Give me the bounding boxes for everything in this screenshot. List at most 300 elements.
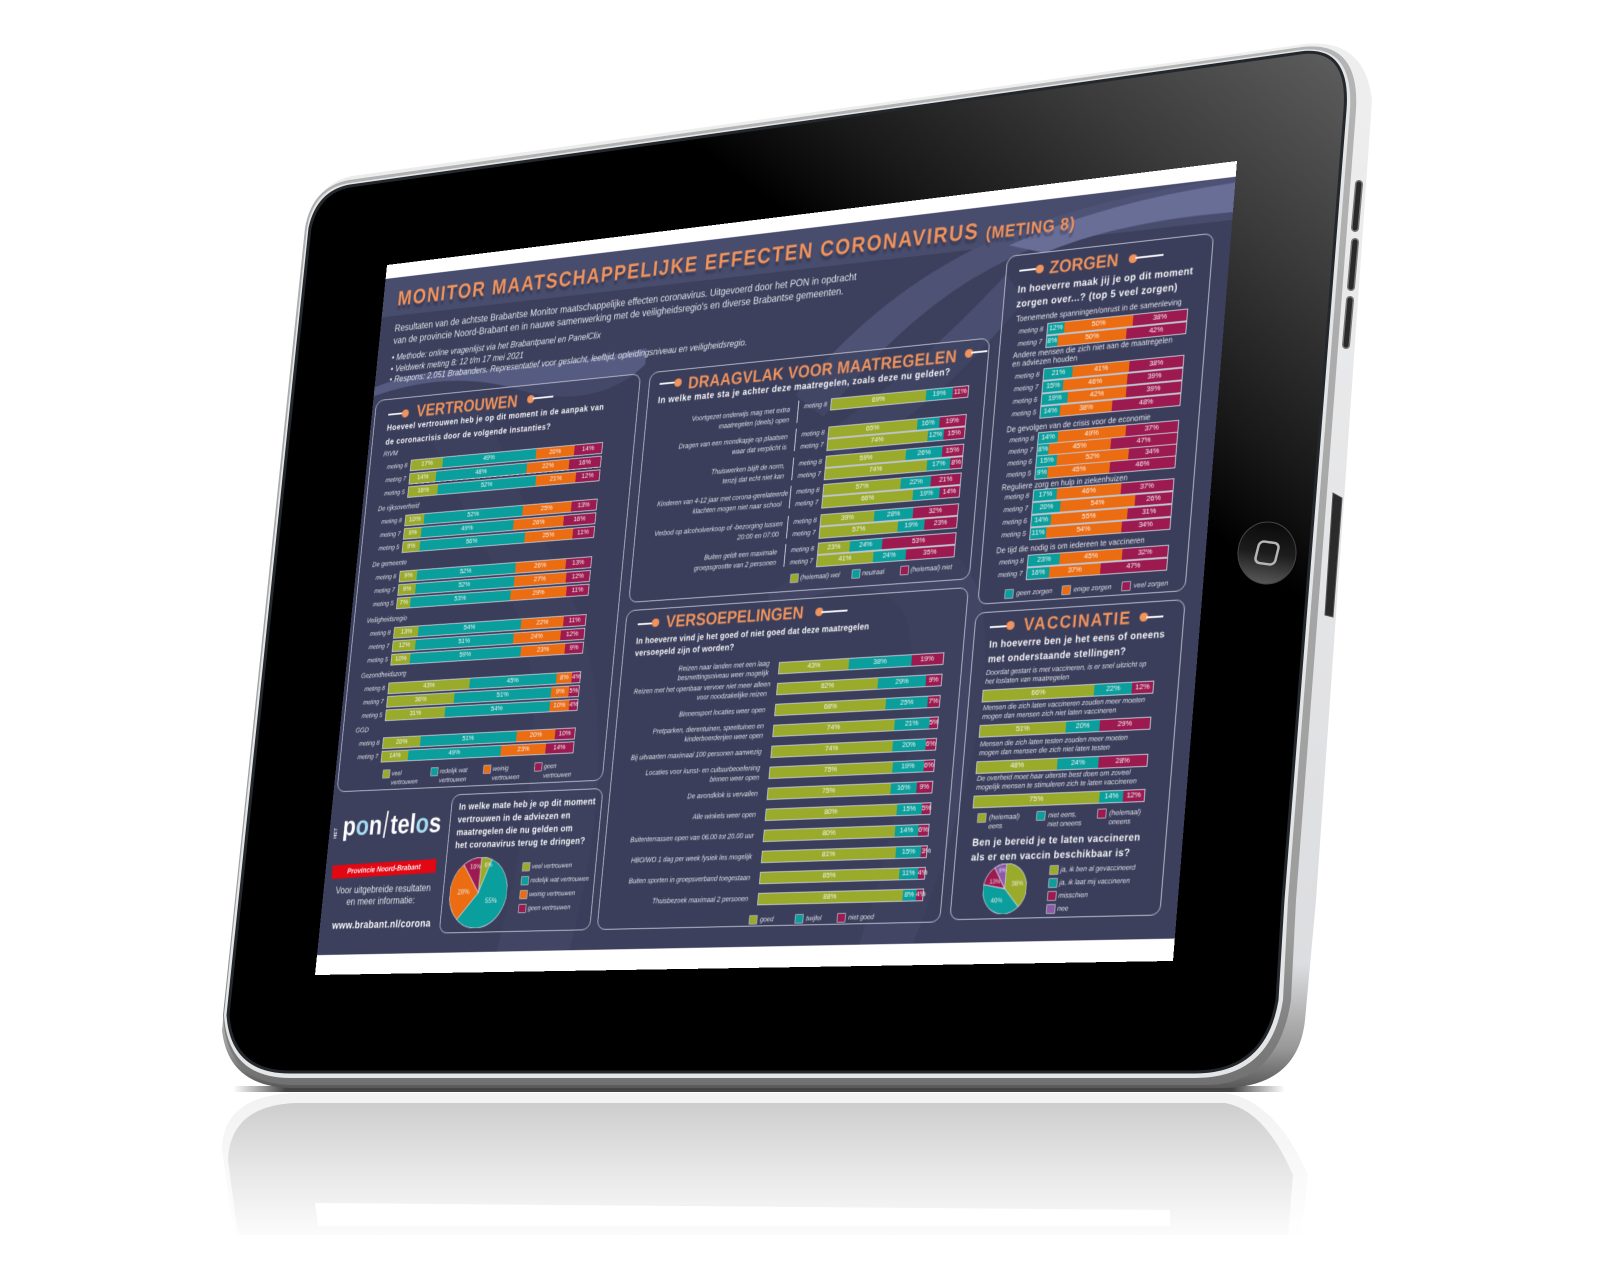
chart: de rijksoverheid: meting 7 [380,530,401,539]
legend: niet eens, [1048,811,1077,819]
chart row: alcohol: 23% [933,518,948,527]
chart: zorg en hulp: 26% [1146,493,1161,503]
chart row 9: 80% [822,828,836,837]
chart row 10: 15% [902,847,916,856]
more information text [332,883,431,931]
chart row: groepsgrootte: Buiten geldt een maximale [704,548,777,562]
chart row: kinderen: 21% [939,474,953,484]
chart row 7: De avondklok is vervallen [687,789,758,801]
chart row 7: 75% [822,786,836,795]
chart row 9: Buitenterrassen open van 06.00 tot 20.00 uur [630,831,754,844]
chart row: alcohol: 32% [928,506,942,515]
chart row: alcohol: 39% [841,513,854,522]
chart row: alcohol: 20:00 en 07:00 [737,530,779,542]
chart row: snel uitzicht: het loslaten van maatregelen [985,673,1070,686]
chart: gezondheidszorg: 5% [569,686,579,695]
legend: vertrouwen: vertrouwen [439,776,467,784]
chart: GGD: 14% [389,751,401,759]
chart: economie: De gevolgen van de crisis voor de economie [1006,412,1151,434]
chart row 3: 25% [900,697,914,707]
chart row: mondkapje: meting 7 [800,441,824,450]
chart row 12: 88% [823,892,837,901]
chart row: thuiswerken: Thuiswerken blijft de norm, [711,461,785,477]
chart row: onderwijs: meting 8 [804,401,827,410]
chart: GGD: 23% [517,744,530,753]
chart row: mondkapje: 16% [921,418,935,428]
chart row: kinderen: 57% [855,481,869,491]
chart: de gemeente: 11% [571,585,584,594]
legend: vertrouwen: vertrouwen [390,778,418,786]
question: het coronavirus terug te dringen? [455,836,586,851]
chart: andere mensen: en adviezen houden [1012,353,1078,369]
chart row 3: Binnensport locaties weer open [679,705,766,719]
chart row: alcohol: meting 7 [792,529,816,538]
chart: GGD: 14% [553,743,566,752]
chart row 10: 81% [822,849,836,858]
chart: veiligheidsregio: 12% [398,640,411,649]
chart row: groepsgrootte: 35% [923,547,937,557]
chart: RIVM: 22% [542,461,554,470]
chart row: kinderen: klachten mogen niet naar school [692,500,782,516]
chart row 4 [652,716,940,743]
intro text: Resultaten van de achtste Brabantse Monitor maatschappelijke effecten coronavirus. Uitgevoerd door het PON in opdracht [394,271,857,334]
legend [1005,577,1179,600]
chart: gezondheidszorg: 8% [559,673,569,682]
chart: de gemeente: 52% [459,566,472,575]
chart row: mondkapje: 74% [870,435,884,444]
chart row 4: Pretparken, dierentuinen, speeltuinen en [652,721,764,736]
chart: de gemeente: 13% [572,558,585,567]
heading: DRAAGVLAK VOOR MAATREGELEN [687,346,958,392]
chart row 7: 16% [896,783,911,792]
chart row: vaccineren [980,695,1152,737]
chart: andere mensen: 15% [1046,380,1060,390]
chart: zorg en hulp: 46% [1082,485,1096,495]
chart row 5: 20% [902,740,916,749]
pie chart: 55% [465,860,477,869]
chart row 4: 5% [929,717,939,727]
chart: zorg en hulp: Reguliere zorg en hulp in ziekenhuizen [1001,473,1128,493]
chart row 4: kinderboerderijen weer open [684,731,763,743]
chart: de rijksoverheid: 11% [577,527,589,536]
chart: GGD: 10% [558,729,571,737]
chart: spanningen: 8% [1047,335,1058,345]
chart: de rijksoverheid: meting 8 [381,517,402,525]
pie chart: 9% [998,868,1006,875]
question: In hoeverre maak jij je op dit moment [1017,265,1194,296]
question: In hoeverre ben je het eens of oneens [989,628,1165,651]
chart: de rijksoverheid: De rijksoverheid [378,501,420,513]
chart row: groepsgrootte [693,532,957,573]
chart row: thuiswerken: 15% [945,445,960,455]
chart row 10: HBO/WO 1 dag per week fysiek les mogelijk [631,852,752,865]
logo: het pon telos [333,807,443,842]
pie chart: 13% [989,879,1000,886]
chart: gezondheidszorg [361,669,582,722]
badge: provincie noord-brabant: Provincie Noord-Brabant [347,862,421,875]
chart row: onderwijs: maatregelen (deels) open [718,415,789,431]
chart: spanningen: Toenemende spanningen/onrust in de samenleving [1016,297,1182,324]
chart: vaccineren: 23% [1037,554,1051,564]
chart: economie: meting 6 [1007,458,1032,467]
chart: veiligheidsregio: 24% [530,632,543,641]
chart: zorg en hulp: 37% [1139,481,1154,491]
chart: zorg en hulp: 31% [1142,506,1157,516]
chart row 3 [678,694,941,719]
ground shadow [233,1086,1285,1092]
chart row: kinderen: meting 7 [795,499,819,508]
legend: (helemaal) [989,813,1020,821]
chart row: overheid: De overheid moet haar uiterste best doen om zoveel [977,768,1131,783]
chart: gezondheidszorg: 4% [572,672,581,681]
legend [336,862,590,914]
chart row: mondkapje: 19% [945,416,959,425]
chart: zorg en hulp: 14% [1034,515,1049,524]
chart row: testen: 24% [1071,757,1085,767]
chart: andere mensen: 39% [1146,383,1161,393]
chart: de gemeente: meting 7 [374,587,395,595]
chart: zorg en hulp: 20% [1039,502,1054,511]
chart row: alcohol: 28% [887,509,901,519]
more information text: en meer informatie: [346,895,415,908]
chart: de gemeente: meting 8 [375,573,397,581]
panel: vertrouwen in adviezen [439,788,603,934]
reflection of tablet [222,1093,1308,1240]
chart: zorg en hulp: 17% [1038,489,1053,499]
chart row 4: 74% [827,722,840,732]
chart row 12: 8% [904,890,915,899]
chart: vaccineren: 45% [1084,551,1098,561]
intro text: • Veldwerk meting 8: 12 t/m 17 mei 2021 [390,350,524,375]
chart: gezondheidszorg: meting 7 [363,698,384,706]
chart row 9: 14% [899,825,914,835]
chart: RIVM: 16% [417,485,429,494]
chart: RIVM: 52% [480,480,493,489]
question: In welke mate sta je achter deze maatregelen, zoals deze nu gelden? [657,367,951,406]
legend [977,806,1161,835]
chart row: snel uitzicht: Doordat gestart is met vaccineren, is er snel uitzicht op [986,660,1147,677]
chart: zorg en hulp: 11% [1031,527,1045,537]
chart row: mondkapje: meting 8 [801,429,825,438]
panel: draagvlak voor maatregelen [628,337,990,603]
chart row 12: 4% [916,889,926,898]
chart row 1: 38% [873,657,887,666]
chart: RIVM: 17% [421,459,433,468]
chart: zorg en hulp: 54% [1090,497,1105,507]
chart: gezondheidszorg: meting 8 [364,685,385,693]
chart: zorg en hulp: meting 8 [1004,492,1029,501]
question [987,627,1182,666]
chart: veiligheidsregio: meting 5 [367,656,388,664]
chart row 6 [645,759,936,784]
chart row 11: 4% [917,868,928,877]
chart: GGD [355,726,576,763]
chart: de gemeente: meting 5 [373,600,394,608]
chart: GGD: 51% [462,734,474,742]
chart: andere mensen: meting 5 [1011,409,1037,418]
chart row: vaccineren: 51% [1015,724,1030,733]
chart: veiligheidsregio: Veiligheidsregio [366,614,407,625]
legend: vertrouwen: geen [544,763,557,770]
chart row: thuiswerken: 17% [932,459,946,468]
legend [748,912,874,925]
chart row: thuiswerken: meting 7 [797,470,821,480]
chart row 1: besmettingsniveau weer mogelijk [677,668,769,682]
chart: vaccineren: 16% [1031,567,1045,577]
legend: oneens [1108,818,1131,826]
chart row: overheid: mogelijk mensen te stimuleren zich te laten vaccineren [976,777,1137,792]
chart: vaccineren: 47% [1126,560,1141,570]
question: vertrouwen in de adviezen en [457,810,571,825]
chart row 1 [677,652,945,682]
chart: andere mensen: 42% [1090,389,1104,399]
chart: economie: 34% [1145,446,1160,456]
chart row: mondkapje [678,414,967,456]
legend: (helemaal) [1109,808,1141,817]
chart row 1: Reizen naar landen met een laag [678,658,770,673]
chart row 6: Locaties voor kunst- en cultuurbeoefening [645,763,761,777]
chart: de gemeente: 9% [404,571,413,579]
pie chart: 10% [470,864,481,871]
chart: RIVM: 49% [483,453,495,462]
chart: gezondheidszorg: Gezondheidszorg [361,669,407,680]
question: met onderstaande stellingen? [988,646,1127,665]
chart: gezondheidszorg: 31% [409,708,422,717]
chart: gezondheidszorg: 45% [506,676,519,685]
chart: veiligheidsregio: 59% [459,650,471,659]
legend: redelijk wat vertrouwen [530,875,589,884]
chart: de gemeente: 27% [534,574,546,583]
chart: RIVM: 21% [549,474,562,483]
chart: GGD: GGD [355,726,369,735]
chart row 7 [686,780,934,801]
chart: de rijksoverheid: 9% [407,541,416,550]
chart row: mondkapje: 12% [929,429,943,439]
chart row 8 [692,802,932,822]
legend [1046,861,1155,916]
chart: zorg en hulp: meting 7 [1003,505,1028,514]
heading: vertrouwen: VERTROUWEN [416,392,519,421]
chart: de gemeente: 12% [571,571,584,580]
chart row: thuiswerken [711,443,964,486]
chart: vaccineren [993,533,1169,582]
chart row 11: 85% [822,871,836,880]
chart: economie: 47% [1136,435,1151,445]
chart row 3: 68% [824,701,837,711]
chart: vaccineren: 32% [1138,547,1153,557]
chart: GGD: meting 7 [357,753,378,761]
chart row: thuiswerken: 8% [951,457,961,467]
chart: andere mensen [1011,335,1185,419]
chart: de gemeente: 53% [454,594,466,602]
chart: gezondheidszorg: meting 5 [361,712,383,720]
chart row 4: 21% [905,718,919,728]
chart row 12 [652,888,926,906]
chart: andere mensen: meting 7 [1014,384,1039,393]
chart: zorg en hulp: 34% [1138,519,1153,529]
chart: spanningen: meting 8 [1018,326,1044,335]
chart: zorg en hulp: 55% [1082,511,1096,521]
chart row: thuiswerken: 26% [917,447,931,457]
chart row 8: 5% [921,803,932,812]
chart: vaccineren: meting 7 [998,570,1023,579]
chart: spanningen: 38% [1153,312,1167,322]
panel: vertrouwen [337,373,641,792]
chart: andere mensen: 14% [1043,405,1058,415]
chart row: overheid: 12% [1126,790,1141,800]
chart: andere mensen: 38% [1079,402,1094,412]
chart row 2: 9% [928,675,939,684]
chart row: groepsgrootte: meting 7 [790,557,813,566]
chart: spanningen: 42% [1149,325,1164,335]
chart: gezondheidszorg: 9% [555,687,565,695]
chart row 6: 75% [824,765,838,774]
chart: economie: 8% [1038,444,1048,454]
chart row 2 [633,673,943,702]
chart row: groepsgrootte: 24% [859,539,873,549]
legend: goed [760,916,774,923]
legend: veel vertrouwen [532,862,572,870]
chart: de rijksoverheid: 25% [540,503,553,512]
chart row: testen: 28% [1115,756,1130,765]
chart: de gemeente: 7% [399,598,408,606]
title suffix: (METING 8) [985,213,1076,243]
chart row: snel uitzicht: 12% [1135,682,1150,692]
chart: veiligheidsregio: 10% [395,654,407,663]
chart row: mondkapje: 65% [866,423,880,433]
side buttons [1325,184,1359,617]
chart: veiligheidsregio: 12% [566,629,579,638]
chart: de rijksoverheid: 9% [408,528,417,537]
chart: andere mensen: 39% [1147,371,1162,381]
intro text: • Respons: 2.051 Brabanders. Representatief voor geslacht, leeftijd, opleidingsniveau en veiligheidsregio. [389,337,748,386]
chart row 5: 74% [825,743,839,753]
chart: economie: meting 7 [1008,446,1033,456]
chart: economie: 52% [1085,451,1100,461]
tablet screen: infographic [315,161,1237,975]
legend: vertrouwen [382,762,572,786]
chart row 6: 19% [901,761,915,770]
chart row: alcohol: Verbod op alcoholverkoop of -bezorging tussen [654,519,783,538]
intro text [389,271,857,386]
chart row: testen: 48% [1010,760,1024,770]
chart: andere mensen: 21% [1051,367,1066,377]
chart row 2: Reizen met het openbaar vervoer niet meer alleen [633,679,771,696]
chart row: groepsgrootte: 41% [838,553,852,563]
chart row: groepsgrootte: groepsgrootte van 2 personen [693,558,777,573]
chart row 5: Bij uitvaarten maximaal 100 personen aanwezig [631,747,762,762]
chart row: testen [977,732,1149,773]
chart row: overheid: 75% [1029,794,1044,803]
chart: de rijksoverheid: meting 5 [378,544,399,552]
second question: als er een vaccin beschikbaar is? [971,847,1131,863]
chart: de rijksoverheid: 10% [409,514,421,523]
chart row: thuiswerken: 59% [859,453,873,462]
chart row: onderwijs: 69% [871,394,885,404]
chart: andere mensen: meting 8 [1015,371,1040,381]
chart: veiligheidsregio [366,614,587,666]
chart: de gemeente: 9% [403,584,412,593]
chart row 11 [628,866,928,886]
chart row: thuiswerken: 74% [869,464,883,474]
chart: de gemeente: 52% [458,580,471,589]
legend: ja, ik ben al gevaccineerd [1060,864,1136,874]
chart: zorg en hulp: meting 5 [1001,530,1026,539]
chart: de rijksoverheid: 16% [573,514,586,523]
chart: RIVM: meting 7 [385,475,406,484]
chart row: thuiswerken: tenzij dat echt niet kan [722,472,784,486]
chart: de gemeente: De gemeente [372,558,407,569]
chart: RIVM: 14% [582,444,595,453]
chart row: alcohol: meting 8 [793,517,817,526]
chart: RIVM: RIVM [383,449,398,458]
chart: economie: 45% [1072,464,1086,474]
chart row: vaccineren: 29% [1117,719,1132,728]
chart: andere mensen: 46% [1088,376,1103,386]
title: MONITOR MAATSCHAPPELIJKE EFFECTEN CORONAVIRUS [397,217,980,310]
chart row: alcohol: 57% [852,524,866,534]
chart: economie [1006,412,1180,480]
second question: Ben je bereid je te laten vaccineren [972,831,1141,849]
chart row 6: binnen weer open [709,772,760,784]
chart row: groepsgrootte: 24% [882,550,896,560]
chart: veiligheidsregio: 13% [400,627,413,636]
chart row 8: 80% [824,807,838,816]
chart: economie: meting 8 [1009,435,1034,444]
question: versoepeld zijn of worden? [635,642,735,658]
chart: RIVM: 14% [417,472,429,481]
heading: VERSOEPELINGEN [665,602,804,632]
chart row: onderwijs: 11% [953,386,967,396]
chart: andere mensen: Andere mensen die zich niet aan de maatregelen [1013,335,1173,360]
chart: de gemeente: 29% [532,588,545,597]
chart: RIVM: 48% [475,467,487,476]
chart: veiligheidsregio: 54% [463,622,476,631]
legend: vertrouwen: vertrouwen [543,771,571,779]
chart: RIVM: 20% [549,447,562,456]
chart: economie: 45% [1072,441,1087,451]
chart: economie: 14% [1041,432,1055,442]
chart row: onderwijs: Voortgezet onderwijs mag met extra [691,405,790,423]
chart row 9: 6% [918,825,929,834]
heading: VACCINATIE [1023,608,1132,635]
more information text: Voor uitgebreide resultaten [335,883,431,896]
chart: de rijksoverheid: 49% [461,523,473,532]
chart: RIVM [383,442,604,498]
chart row: vaccineren: 20% [1075,721,1090,730]
chart row: overheid: 14% [1104,791,1119,801]
chart row 10 [630,845,932,865]
home button [1234,518,1300,588]
chart row: testen: mogen dan mensen die zich niet laten testen [979,744,1110,758]
legend: misschien [1058,891,1088,900]
question [634,621,870,658]
question: maatregelen die nu gelden om [456,823,573,838]
chart row 5: 6% [925,739,936,748]
chart row: kinderen: 14% [942,486,957,496]
chart: de rijksoverheid: 56% [465,536,478,545]
legend: niet oneens [1047,820,1082,828]
chart: de gemeente: 26% [534,561,547,570]
badge: provincie noord-brabant [332,859,437,879]
chart: RIVM: meting 5 [384,489,405,497]
chart: de rijksoverheid: 26% [532,517,545,527]
chart: gezondheidszorg: 43% [423,681,435,690]
legend: enige zorgen [1073,583,1112,593]
legend: ja, ik laat mij vaccineren [1059,877,1130,887]
legend: geen vertrouwen [528,904,571,912]
chart row: snel uitzicht: 66% [1031,687,1046,697]
